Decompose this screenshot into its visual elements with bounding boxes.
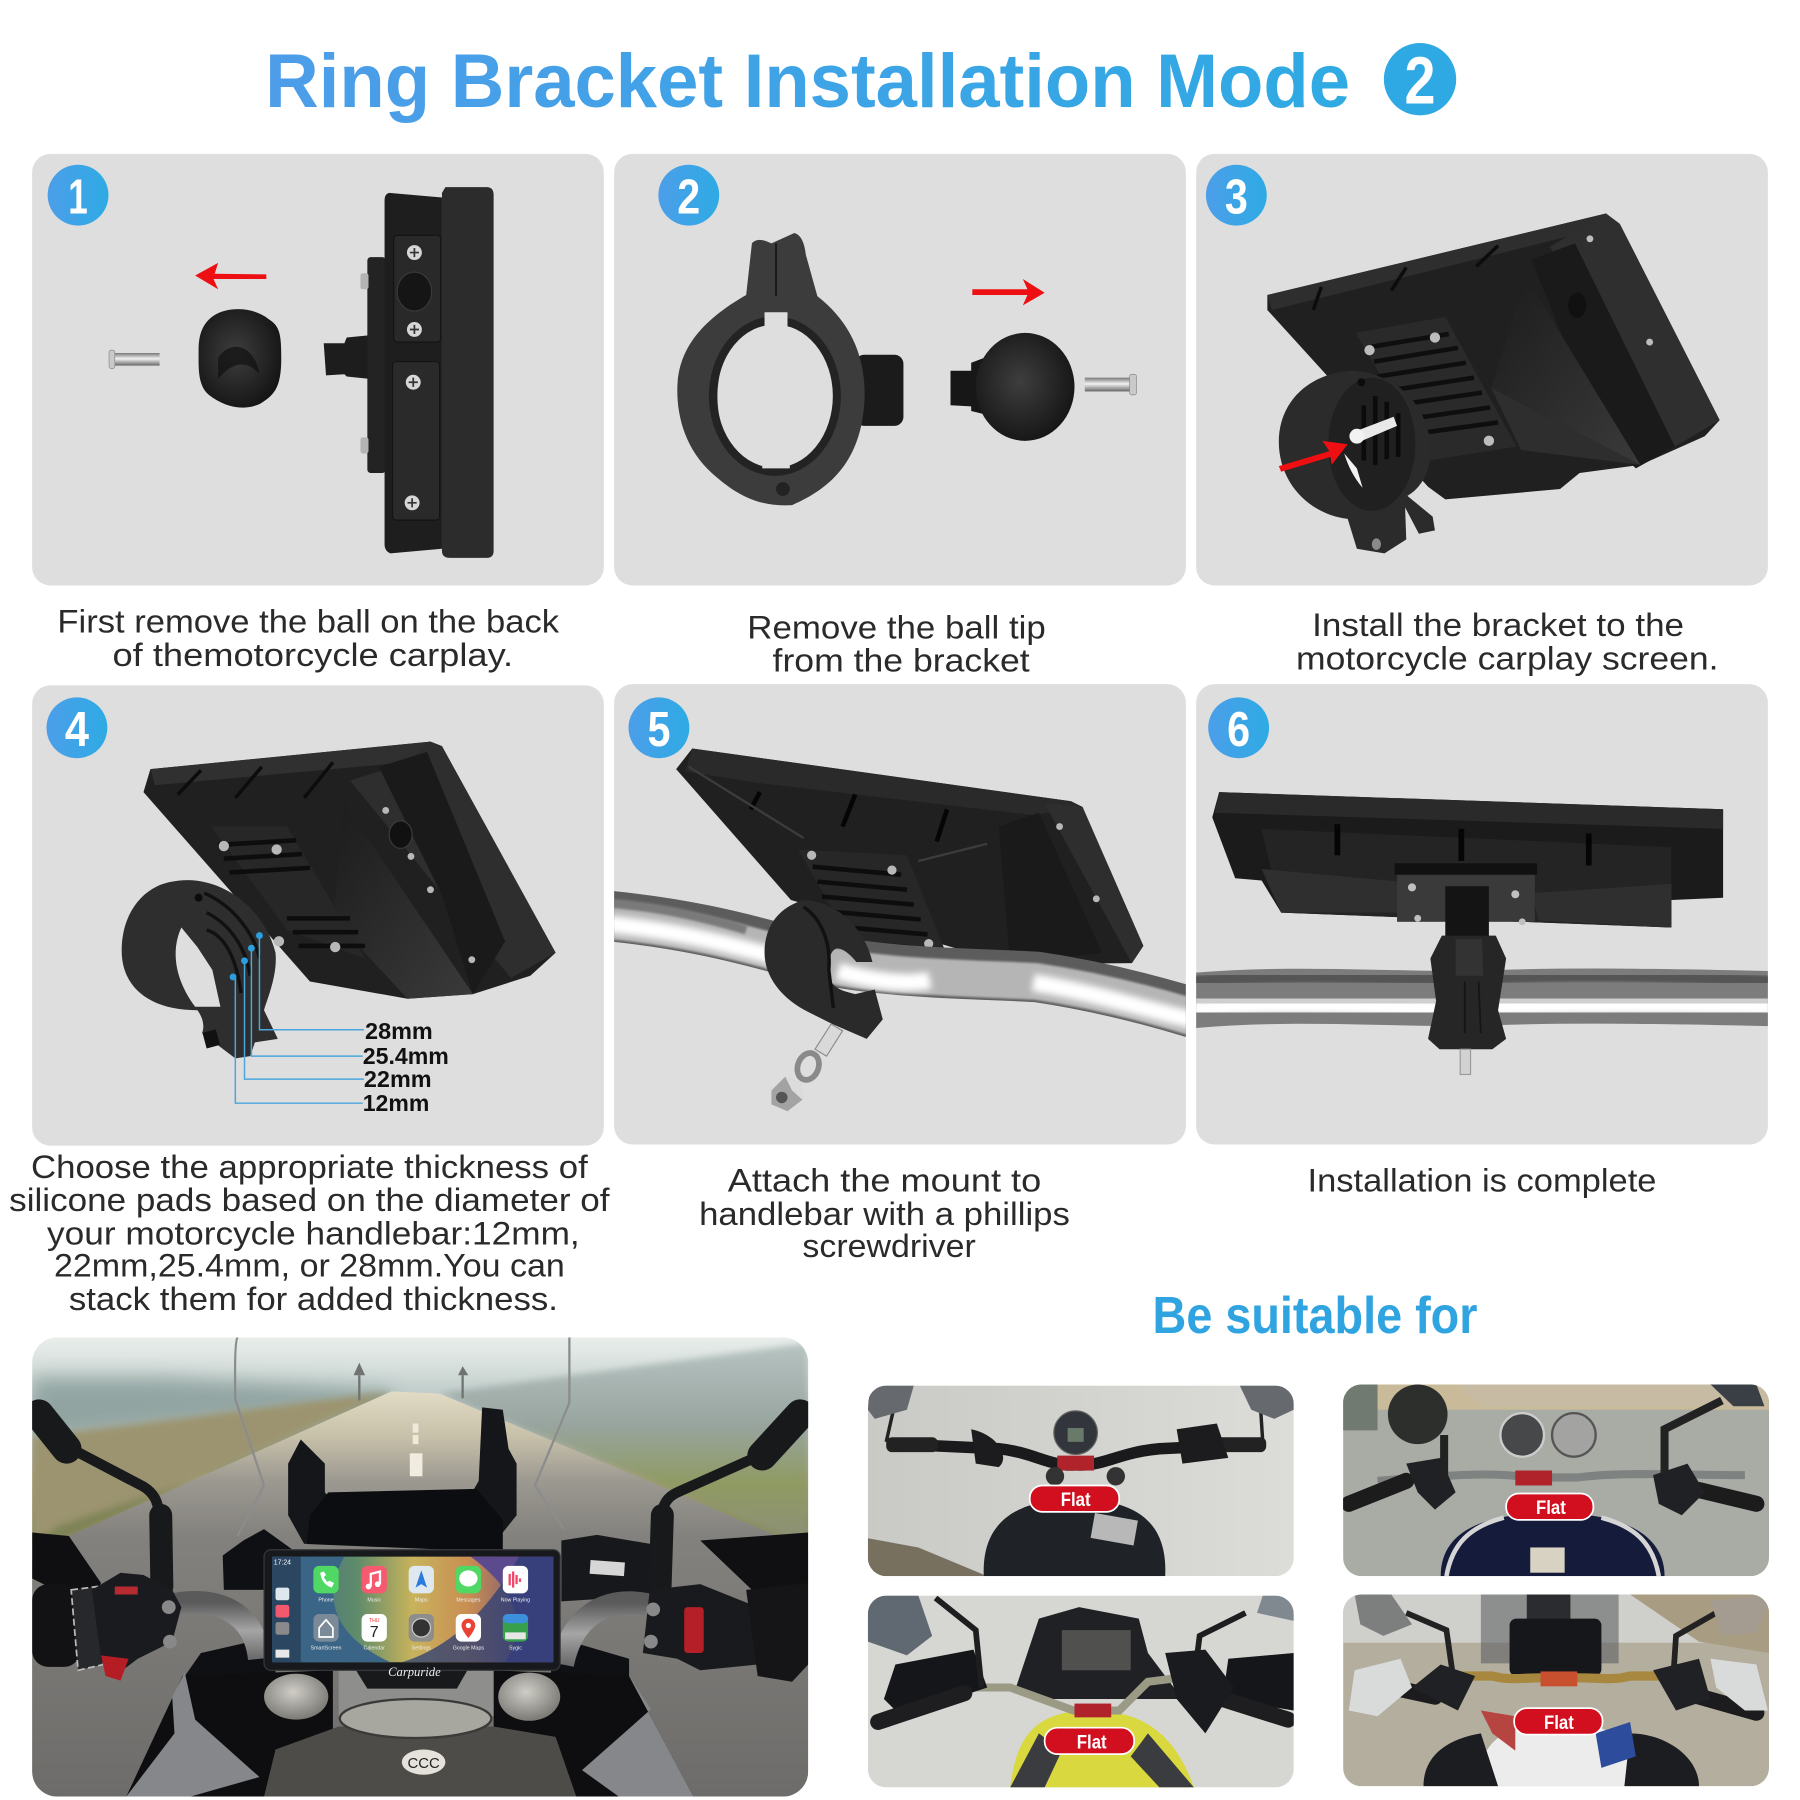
panel: step 1: 1	[68, 170, 88, 225]
caption: step 3: Install the bracket to the	[1312, 606, 1684, 643]
badge: CCC: CCC	[407, 1755, 440, 1772]
caption: step 1: First remove the ball on the back	[57, 603, 560, 640]
app labels: Sygic	[509, 1646, 522, 1652]
panel: step 1	[32, 154, 604, 585]
label: Flat: Flat	[1061, 1489, 1091, 1511]
app labels: Phone	[318, 1597, 334, 1603]
app icons: THU	[369, 1618, 380, 1624]
app labels: Messages	[456, 1597, 481, 1603]
instrument cowl	[307, 1489, 503, 1552]
photo: bike 4	[1343, 1595, 1769, 1786]
caption: step 2: from the bracket	[773, 642, 1030, 679]
photo: motorcycle with screen	[32, 1337, 808, 1797]
callout: pad sizes: 25.4mm	[363, 1043, 449, 1069]
mirrors	[39, 1414, 800, 1586]
caption: step 4: Choose the appropriate thickness of	[31, 1148, 589, 1185]
left switch gear and glove	[32, 1573, 181, 1681]
label: Flat	[1506, 1493, 1593, 1520]
caption: step 4: silicone pads based on the diameter of	[9, 1181, 611, 1218]
callout: pad sizes	[230, 932, 449, 1116]
tank cap	[340, 1699, 491, 1738]
app icons	[313, 1566, 528, 1642]
heading: be suitable for: Be suitable for	[1153, 1286, 1477, 1344]
caption: step 6: Installation is complete	[1308, 1162, 1657, 1199]
callout: pad sizes: 22mm	[364, 1066, 432, 1092]
caption: step 5: Attach the mount to	[728, 1162, 1041, 1199]
panel: step 5: 5	[647, 702, 670, 757]
device back	[1267, 214, 1720, 499]
carplay screen	[264, 1550, 560, 1689]
panel: step 3: 3	[1225, 170, 1248, 225]
arrow: red right	[972, 279, 1045, 305]
label: Flat: Flat	[1077, 1731, 1107, 1753]
icon: ring clamp	[1279, 371, 1435, 553]
caption: step 3	[1296, 606, 1718, 676]
caption: step 2: Remove the ball tip	[747, 608, 1046, 645]
caption: step 2	[747, 608, 1046, 679]
icon: screw pin	[1085, 374, 1136, 395]
app labels: Music	[367, 1597, 381, 1603]
device back	[143, 742, 556, 999]
device side view	[324, 187, 494, 558]
icon: handlebar clamp	[1428, 936, 1506, 1074]
app labels: SmartScreen	[311, 1646, 341, 1652]
panel: step 4	[32, 685, 604, 1146]
app labels: Now Playing	[501, 1597, 530, 1603]
handlebars	[172, 1602, 649, 1665]
photo: bike 1	[868, 1386, 1294, 1576]
handlebar	[597, 902, 1200, 1022]
app labels: Settings	[412, 1646, 431, 1652]
icon: screw pin	[109, 350, 160, 368]
caption: step 5: handlebar with a phillips	[699, 1195, 1070, 1232]
motorcycle body	[126, 1670, 693, 1797]
caption: step 5: screwdriver	[802, 1227, 976, 1264]
app labels: Calendar	[364, 1646, 385, 1652]
panel: step 4: 4	[65, 702, 89, 757]
handlebar	[1188, 976, 1777, 1010]
fairing and reservoir	[32, 1529, 808, 1676]
app labels: Google Maps	[453, 1646, 484, 1652]
field left	[32, 1391, 391, 1544]
device back	[676, 748, 1143, 970]
arrow: red left	[195, 263, 266, 289]
device back	[1212, 792, 1723, 938]
app labels: Maps	[415, 1597, 428, 1603]
caption: step 3: motorcycle carplay screen.	[1296, 639, 1718, 676]
panel: step 6: 6	[1227, 702, 1250, 757]
icon: ball tip	[951, 333, 1074, 441]
label: Flat	[1045, 1728, 1134, 1754]
carplay screen: 17:24	[274, 1560, 291, 1567]
app icons: 7	[370, 1623, 379, 1641]
label: Flat: Flat	[1544, 1712, 1574, 1734]
label: Flat: Flat	[1536, 1497, 1566, 1519]
label: Flat	[1030, 1485, 1119, 1512]
caption: step 4	[9, 1148, 611, 1317]
icon: pin	[1349, 417, 1397, 444]
title: Ring Bracket Installation Mode	[265, 39, 1350, 124]
arrow: red diagonal	[1279, 441, 1348, 472]
icon: handlebar clamp	[765, 900, 883, 1039]
panel: step 6	[1188, 684, 1777, 1145]
callout: pad sizes: 12mm	[363, 1090, 429, 1116]
icon: ring clamp with pads	[122, 880, 278, 1058]
icon: screw, washer and nut	[771, 1024, 843, 1111]
caption: step 4: your motorcycle handlebar:12mm,	[47, 1214, 580, 1251]
caption: step 4: 22mm,25.4mm, or 28mm.You can	[54, 1247, 565, 1284]
windscreen outline	[235, 1337, 569, 1536]
panel: step 3	[1196, 154, 1768, 585]
panel: step 5	[597, 684, 1200, 1145]
panel: step 2: 2	[677, 170, 700, 225]
photo: bike 2	[1343, 1384, 1769, 1576]
photo: bike 3	[868, 1596, 1294, 1787]
icon: ring clamp	[677, 233, 865, 505]
title: 2	[1405, 44, 1436, 118]
road signs	[354, 1363, 468, 1401]
background treeline	[32, 1378, 391, 1435]
carplay screen: Carpuride	[388, 1665, 441, 1679]
field right	[440, 1343, 808, 1544]
icon: stub	[855, 355, 903, 426]
app labels	[311, 1597, 530, 1652]
caption: step 1	[57, 603, 560, 673]
callout: pad sizes: 28mm	[365, 1018, 433, 1044]
right switch gear and glove	[643, 1583, 808, 1682]
label: Flat	[1514, 1708, 1603, 1735]
road	[32, 1391, 808, 1797]
caption: step 5	[699, 1162, 1070, 1264]
badge: CCC	[402, 1749, 445, 1775]
fuel tank	[264, 1727, 576, 1797]
panel: step 2	[614, 154, 1186, 585]
windscreen brackets	[288, 1407, 517, 1544]
icon: ball	[199, 309, 281, 408]
caption: step 1: of themotorcycle carplay.	[113, 636, 513, 673]
caption: step 4: stack them for added thickness.	[69, 1280, 558, 1317]
